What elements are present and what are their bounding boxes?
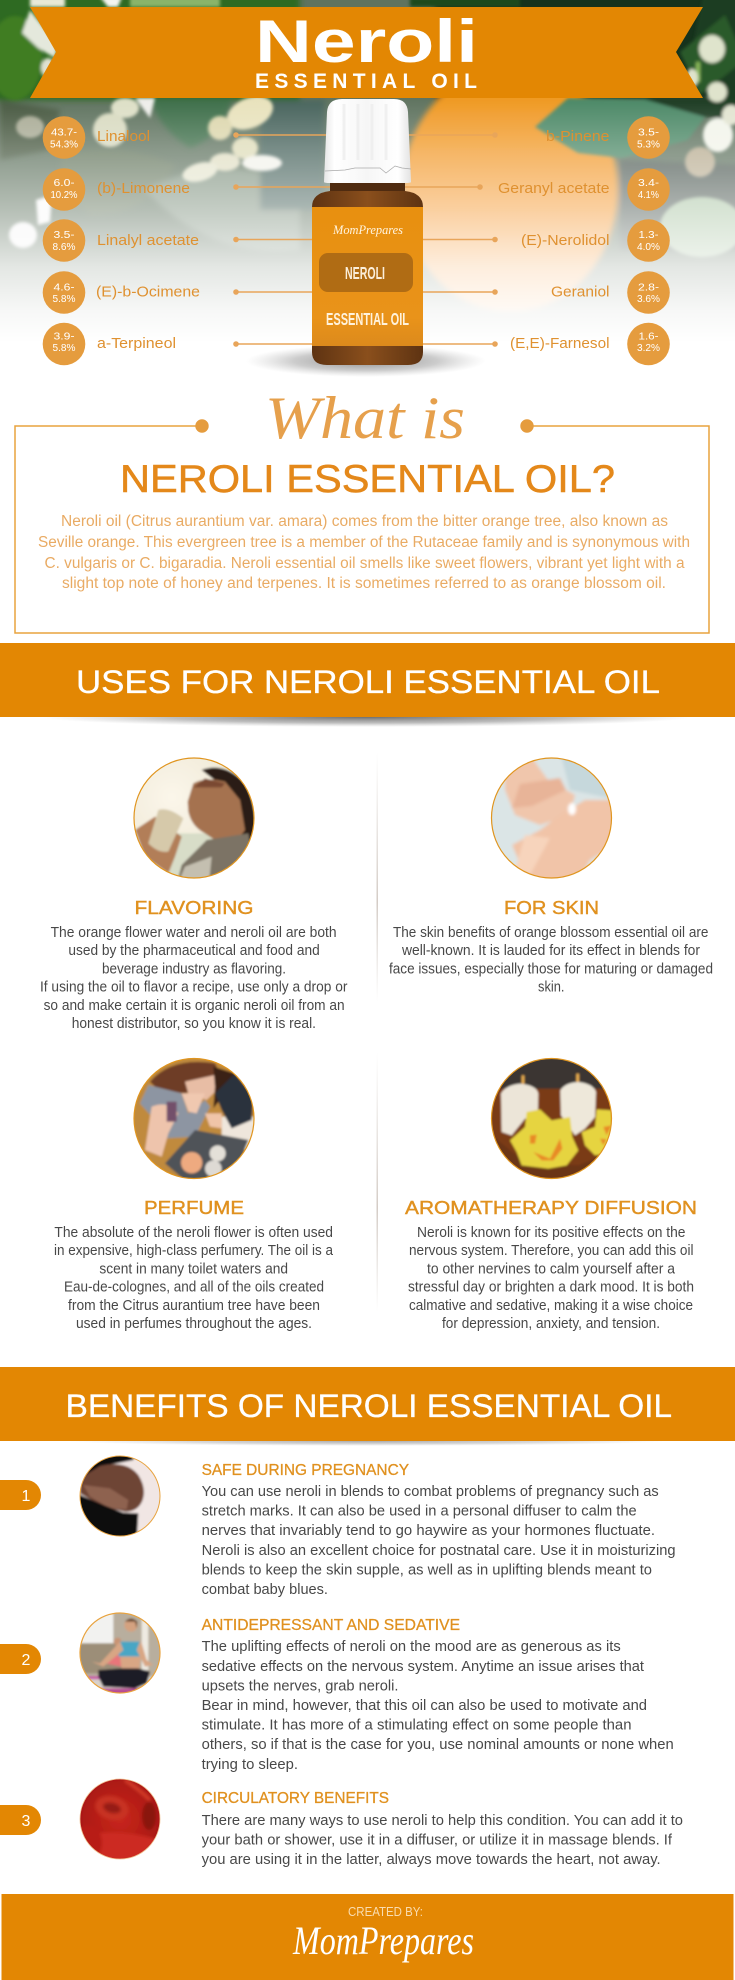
compound: Linalool: Linalool xyxy=(97,128,150,145)
benefit 1 text xyxy=(202,1484,676,1598)
compound: Linalool: 54.3% xyxy=(50,140,78,150)
number tab 2 xyxy=(0,1644,41,1674)
compound: (b)-Limonene xyxy=(43,168,190,211)
description text: C. vulgaris or C. bigaradia. Neroli essential oil smells like sweet flowers, vibrant yet light with a xyxy=(44,555,685,572)
benefit 1 text: nerves that invariably tend to go haywire as your hormones fluctuate. xyxy=(202,1523,655,1539)
compound: Geraniol: 3.6% xyxy=(637,294,660,305)
compound: a-Terpineol: a-Terpineol xyxy=(97,335,176,352)
compound: Geraniol: Geraniol xyxy=(551,284,610,300)
compound: b-Pinene: 3.5- xyxy=(638,128,659,138)
photo: candles and flowers xyxy=(490,1058,612,1180)
heading: Neroli Essential Oil?: NEROLI ESSENTIAL OIL? xyxy=(120,458,615,501)
label name box: NEROLI xyxy=(345,263,385,283)
compound: (E)-Nerolidol: 1.3- xyxy=(638,230,658,241)
subtitle: Essential Oil: ESSENTIAL OIL xyxy=(255,70,477,93)
compound: b-Pinene: 5.3% xyxy=(637,140,660,150)
benefit 2 text: upsets the nerves, grab neroli. xyxy=(202,1678,398,1694)
compound: Linalool xyxy=(43,116,150,159)
number tab 3: 3 xyxy=(22,1813,31,1830)
aromatherapy text: nervous system. Therefore, you can add this oil xyxy=(409,1243,694,1259)
aromatherapy text: calmative and sedative, making it a wise choice xyxy=(409,1298,693,1314)
label essential oil: ESSENTIAL OIL xyxy=(326,309,409,329)
benefit 1 text: combat baby blues. xyxy=(202,1582,328,1598)
hero background: orange blossoms and fruit xyxy=(0,0,735,312)
photo: woman sipping xyxy=(133,757,255,879)
description text: Neroli oil (Citrus aurantium var. amara) comes from the bitter orange tree, also known as xyxy=(61,513,668,530)
benefit 3 text: you are using it in the latter, always move towards the heart, not away. xyxy=(202,1852,661,1868)
compound: (E)-Nerolidol: 4.0% xyxy=(637,242,660,253)
compound: (E)-Nerolidol xyxy=(521,219,670,262)
use: for skin xyxy=(389,752,713,996)
photo: red blood cells xyxy=(80,1778,160,1860)
bottle label xyxy=(312,207,423,346)
compound: (E)-b-Ocimene: (E)-b-Ocimene xyxy=(96,284,200,300)
for skin text: face issues, especially those for maturing or damaged xyxy=(389,962,713,978)
benefit 3 text: your bath or shower, use it in a diffuser, or utilize it in massage blends. If xyxy=(202,1832,673,1848)
compound: a-Terpineol xyxy=(43,323,176,365)
flavoring text: used by the pharmaceutical and food and xyxy=(68,943,320,959)
compound: (b)-Limonene: (b)-Limonene xyxy=(97,180,190,197)
title: Neroli: Neroli xyxy=(255,8,478,75)
panel: what is neroli xyxy=(15,385,709,633)
compound: Geranyl acetate: 4.1% xyxy=(638,190,659,201)
for skin text xyxy=(389,925,713,996)
number tab 1 xyxy=(0,1480,41,1510)
aromatherapy text: to other nervines to calm yourself after a xyxy=(427,1262,676,1278)
flavoring text: honest distributor, so you know it is real. xyxy=(72,1016,316,1032)
use: flavoring xyxy=(40,743,348,1032)
benefit 1: safe during pregnancy xyxy=(0,1443,676,1598)
perfume text: Eau-de-colognes, and all of the oils created xyxy=(64,1280,324,1296)
use: for skin: FOR SKIN xyxy=(504,898,599,918)
compound: Linalyl acetate xyxy=(43,219,199,262)
photo: woman doing yoga xyxy=(79,1612,161,1694)
compound: Geranyl acetate: Geranyl acetate xyxy=(498,180,610,197)
compound: a-Terpineol: 3.9- xyxy=(54,332,74,342)
section band: uses xyxy=(0,643,735,727)
benefit 2 text: sedative effects on the nervous system. Anytime an issue arises that xyxy=(202,1659,644,1675)
benefit 2 text: Bear in mind, however, that this oil can also be used to motivate and xyxy=(202,1698,647,1714)
benefit 2 text: The uplifting effects of neroli on the mood are as generous as its xyxy=(202,1639,621,1655)
for skin text: well-known. It is lauded for its effect in blends for xyxy=(401,943,700,959)
connector lines between compounds and bottle xyxy=(233,132,498,347)
title banner xyxy=(30,7,703,98)
bottle neck xyxy=(330,180,405,196)
aromatherapy text: for depression, anxiety, and tension. xyxy=(442,1316,660,1332)
section band: benefits: BENEFITS OF NEROLI ESSENTIAL OIL xyxy=(66,1388,672,1424)
compound: a-Terpineol: 5.8% xyxy=(52,343,76,354)
compound: (b)-Limonene: 10.2% xyxy=(50,190,78,201)
flavoring text xyxy=(40,925,348,1032)
benefit 1 text: Neroli is also an excellent choice for postnatal care. Use it in moisturizing xyxy=(202,1543,676,1559)
created by: CREATED BY: xyxy=(348,1905,423,1919)
perfume text: The absolute of the neroli flower is often used xyxy=(54,1225,333,1241)
benefit 1 text: You can use neroli in blends to combat problems of pregnancy such as xyxy=(202,1484,659,1500)
section band: benefits xyxy=(0,1367,735,1446)
bottle body xyxy=(312,191,423,365)
benefit 1 text: blends to keep the skin supple, as well as in uplifting blends meant to xyxy=(202,1562,652,1578)
benefit 2 text: others, so if that is the case for you, use nominal amounts or none when xyxy=(202,1737,674,1753)
use: flavoring: FLAVORING xyxy=(134,898,254,918)
flavoring text: so and make certain it is organic neroli oil from an xyxy=(44,998,345,1014)
for skin text: skin. xyxy=(538,980,564,996)
for skin text: The skin benefits of orange blossom essential oil are xyxy=(393,925,708,941)
perfume text: used in perfumes throughout the ages. xyxy=(76,1316,312,1332)
perfume text: in expensive, high-class perfumery. The oil is a xyxy=(54,1243,334,1259)
benefit 2: antidepressant and sedative: ANTIDEPRESSANT AND SEDATIVE xyxy=(202,1617,460,1634)
flavoring text: The orange flower water and neroli oil are both xyxy=(51,925,337,941)
number tab 1: 1 xyxy=(22,1488,31,1505)
benefit 1 text: stretch marks. It can also be used in a personal diffuser to calm the xyxy=(202,1504,637,1520)
compound: Linalyl acetate: 3.5- xyxy=(54,230,74,241)
compound: Linalool: 43.7- xyxy=(51,128,77,138)
compound: Geraniol xyxy=(551,271,670,314)
compound: Geranyl acetate xyxy=(498,168,670,211)
photo: woman spraying perfume xyxy=(133,1058,255,1180)
perfume text xyxy=(54,1225,334,1332)
compound: Geranyl acetate: 3.4- xyxy=(638,178,659,189)
use: perfume: PERFUME xyxy=(144,1198,244,1218)
bottle cap xyxy=(324,99,411,183)
benefit 3: circulatory benefits xyxy=(0,1773,683,1868)
benefit 1: safe during pregnancy: SAFE DURING PREGNANCY xyxy=(202,1462,409,1479)
description text: slight top note of honey and terpenes. It is sometimes referred to as orange blossom oil. xyxy=(62,575,666,592)
compound: (E)-b-Ocimene: 4.6- xyxy=(54,282,74,294)
perfume text: scent in many toilet waters and xyxy=(99,1262,288,1278)
compound: b-Pinene: b-Pinene xyxy=(546,128,610,145)
compound: (E,E)-Farnesol: 1.6- xyxy=(638,332,658,342)
footer xyxy=(2,1894,734,1980)
compounds right column xyxy=(498,116,670,365)
label brand: MomPrepares xyxy=(332,222,403,237)
compound: (E)-Nerolidol: (E)-Nerolidol xyxy=(521,232,610,249)
benefit 3 text xyxy=(202,1813,683,1868)
compound: (E)-b-Ocimene xyxy=(43,271,200,314)
use: aromatherapy diffusion: AROMATHERAPY DIFFUSION xyxy=(405,1198,697,1218)
compounds left column xyxy=(43,116,200,365)
section band: uses: USES FOR NEROLI ESSENTIAL OIL xyxy=(76,664,660,700)
flavoring text: beverage industry as flavoring. xyxy=(102,962,286,978)
photo: hands with cream xyxy=(490,757,612,879)
benefit 3: circulatory benefits: CIRCULATORY BENEFITS xyxy=(202,1790,389,1807)
aromatherapy text xyxy=(408,1225,694,1332)
heading: What is: What is xyxy=(265,385,465,451)
bottle shadow xyxy=(246,345,486,377)
compound: (E,E)-Farnesol xyxy=(510,323,670,365)
compound: Linalyl acetate: Linalyl acetate xyxy=(97,232,199,249)
benefit 2 text xyxy=(202,1639,674,1773)
use: aromatherapy diffusion xyxy=(405,1045,697,1332)
compound: (E,E)-Farnesol: 3.2% xyxy=(637,343,660,354)
compound: (E,E)-Farnesol: (E,E)-Farnesol xyxy=(510,335,610,352)
description text: Seville orange. This evergreen tree is a member of the Rutaceae family and is synonymous with xyxy=(38,534,690,551)
description text xyxy=(38,513,690,592)
benefit 2 text: stimulate. It has more of a stimulating effect on some people than xyxy=(202,1718,632,1734)
benefit 2: antidepressant and sedative xyxy=(0,1607,674,1773)
aromatherapy text: stressful day or brighten a dark mood. It is both xyxy=(408,1280,694,1296)
photo: pregnant belly xyxy=(80,1456,160,1536)
number tab 3 xyxy=(0,1805,41,1835)
compound: b-Pinene xyxy=(546,116,670,159)
aromatherapy text: Neroli is known for its positive effects on the xyxy=(417,1225,686,1241)
benefit 3 text: There are many ways to use neroli to help this condition. You can add it to xyxy=(202,1813,683,1829)
essential oil bottle xyxy=(312,99,423,365)
benefit 2 text: trying to sleep. xyxy=(202,1757,298,1773)
perfume text: from the Citrus aurantium tree have been xyxy=(68,1298,320,1314)
compound: (b)-Limonene: 6.0- xyxy=(54,178,74,189)
compound: Geraniol: 2.8- xyxy=(638,282,659,294)
compound: Linalyl acetate: 8.6% xyxy=(52,242,76,253)
use: perfume xyxy=(54,1043,334,1332)
compound: (E)-b-Ocimene: 5.8% xyxy=(52,294,76,305)
number tab 2: 2 xyxy=(22,1652,31,1669)
brand logo: MomPrepares xyxy=(292,1918,474,1963)
flavoring text: If using the oil to flavor a recipe, use only a drop or xyxy=(40,980,348,996)
